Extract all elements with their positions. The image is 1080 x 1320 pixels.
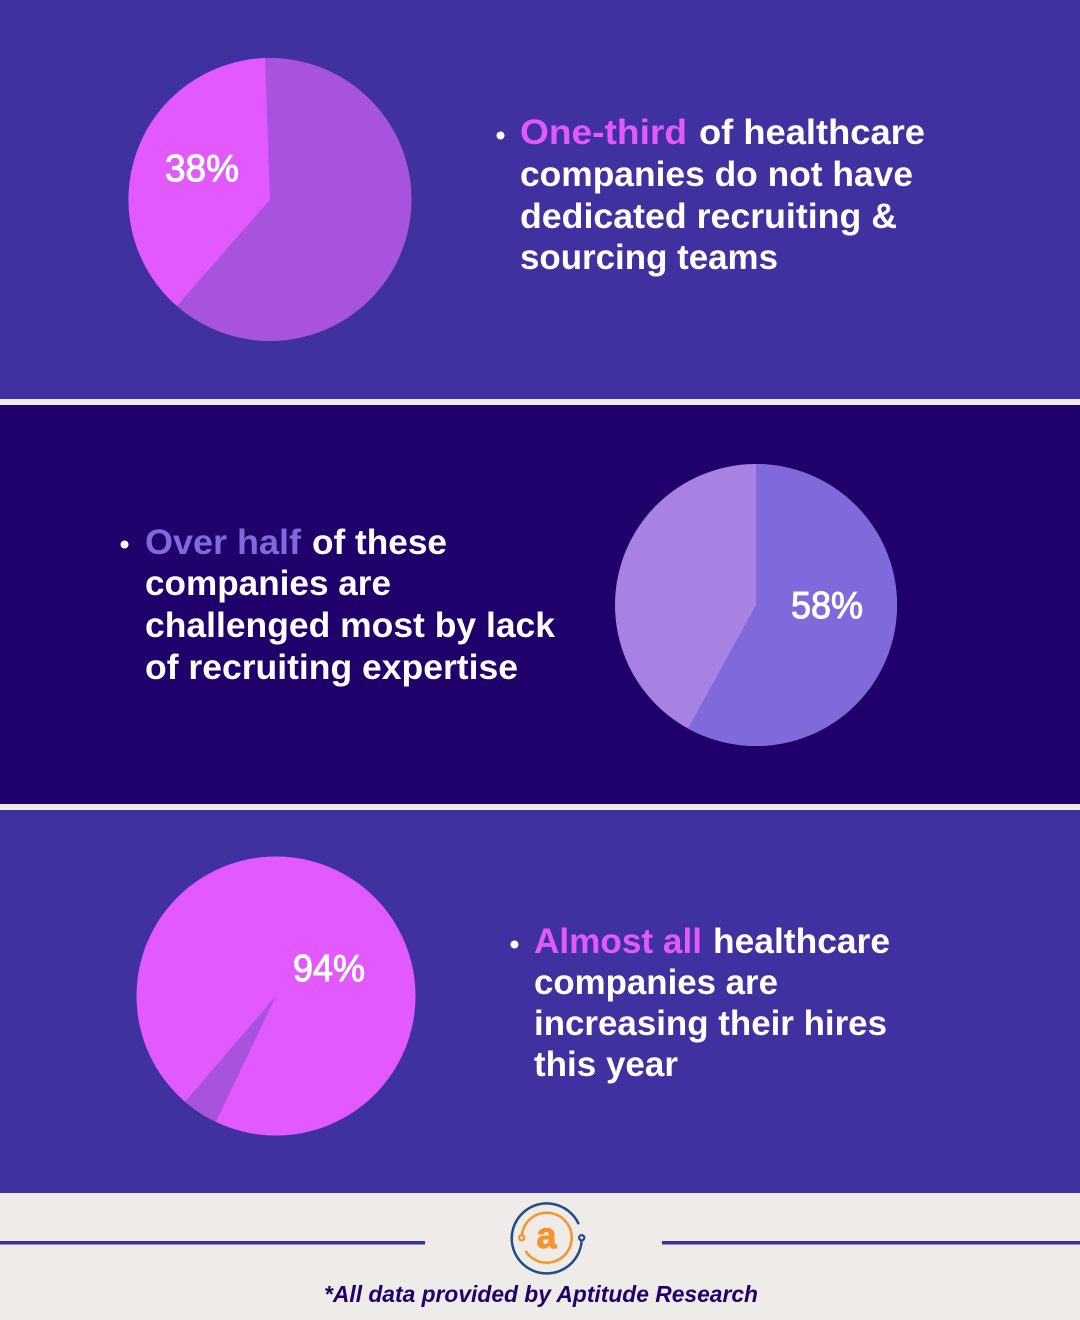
pie chart: 58%: 58% [791,585,863,627]
text block: one-third: of healthcare [699,113,925,152]
footnote: *All data provided by Aptitude Research [324,1281,758,1307]
text block: over half [120,523,556,687]
pie chart: 38% [128,58,412,341]
left footer rule [0,1241,425,1244]
pie chart: 94%: 94% [293,948,365,990]
pie chart: 94% [136,856,416,1136]
text block: one-third [496,113,925,277]
panel background [0,405,1080,804]
text block: almost all: increasing their hires [534,1004,887,1043]
text block: over half: companies are [145,564,391,603]
pie chart: 38%: 38% [165,148,239,190]
text block: almost all [510,922,890,1084]
footer [0,1193,1080,1320]
panel: over half statistic [0,405,1080,804]
icon: Aptitude Research logo: a [536,1215,557,1256]
text block: one-third: dedicated recruiting & [520,197,897,236]
text block: over half: Over half [145,523,301,562]
text block: over half: challenged most by lack [145,606,556,645]
icon: Aptitude Research logo [512,1203,584,1273]
text block: over half: of these [312,523,447,562]
pie chart: 58% [615,464,897,746]
panel: one-third statistic [0,0,1080,399]
right footer rule [662,1241,1080,1244]
text block: almost all: this year [534,1045,678,1084]
text block: one-third: companies do not have [520,155,913,194]
panel: almost all statistic [0,810,1080,1193]
panel background [0,0,1080,399]
text block: over half: of recruiting expertise [145,648,518,687]
text block: almost all: Almost all [534,922,702,961]
text block: one-third: One-third [520,113,687,152]
footer background [0,1193,1080,1320]
text block: one-third: sourcing teams [520,238,778,277]
text block: almost all: companies are [534,963,778,1002]
text block: almost all: healthcare [713,922,890,961]
panel background [0,810,1080,1193]
